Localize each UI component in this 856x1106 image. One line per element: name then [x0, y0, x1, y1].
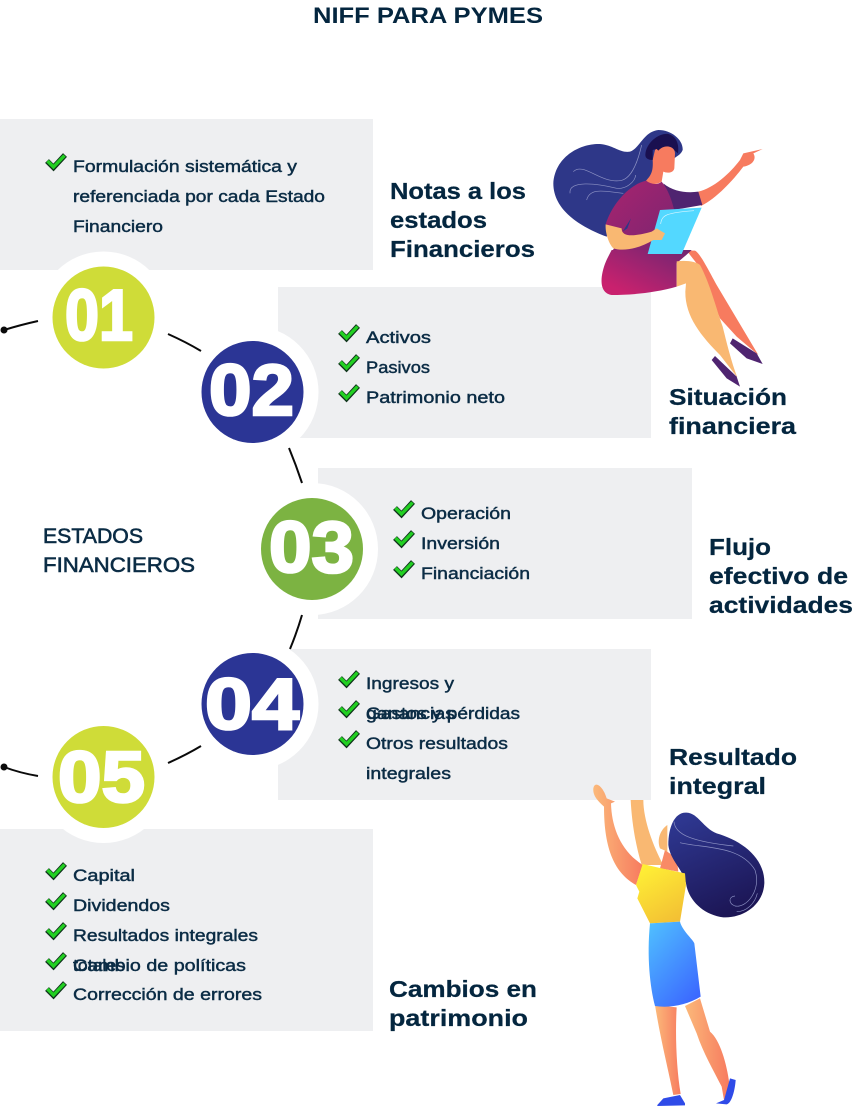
panel: notas backdrop: [0, 119, 373, 270]
center label: estados financieros: FINANCIEROS: [43, 554, 195, 577]
step 03 badge: 03: [269, 508, 354, 588]
list: resultado integral: integrales: [366, 765, 451, 783]
heading: resultado integral: Resultado: [669, 744, 797, 770]
list: situacion financiera: Activos: [366, 329, 431, 347]
center label: estados financieros: ESTADOS: [43, 525, 143, 548]
heading: notas: estados: [390, 207, 487, 233]
heading: cambios en patrimonio: patrimonio: [389, 1005, 528, 1031]
heading: situacion financiera: [669, 384, 796, 439]
panel: situacion backdrop: [278, 287, 651, 438]
list: resultado integral: [340, 672, 520, 783]
illustration: seated woman with tablet: [553, 130, 763, 387]
heading: cambios en patrimonio: Cambios en: [389, 976, 537, 1002]
list: situacion financiera: Pasivos: [366, 359, 430, 377]
list: notas: Financiero: [73, 218, 163, 236]
heading: resultado integral: integral: [669, 773, 766, 799]
list: flujo: Inversión: [421, 535, 500, 553]
heading: resultado integral: [669, 744, 797, 799]
list: cambios en patrimonio: totales: [73, 957, 125, 975]
step 02 badge: 02: [209, 351, 294, 431]
list: cambios en patrimonio: Cambio de políticas: [73, 957, 246, 975]
step 02 badge: [186, 326, 318, 458]
heading: flujo: [709, 534, 853, 618]
list: situacion financiera: [340, 326, 505, 407]
panel: flujo backdrop: [318, 468, 692, 619]
illustration: standing woman holding panel: [593, 785, 764, 1106]
step 05 badge: 05: [58, 738, 145, 818]
list: resultado integral: Otros resultados: [366, 735, 508, 753]
step 04 badge: [186, 638, 318, 770]
heading: situacion financiera: financiera: [669, 413, 796, 439]
connector arc between steps: [0, 321, 302, 776]
list: resultado integral: ganancias: [366, 705, 455, 723]
step 05 badge: [38, 711, 170, 843]
step 01 badge: 01: [65, 276, 133, 356]
heading: notas: [390, 178, 535, 262]
list: cambios en patrimonio: Dividendos: [73, 897, 170, 915]
list: resultado integral: Ingresos y: [366, 675, 455, 693]
list: resultado integral: Gastos y pérdidas: [366, 705, 520, 723]
step 04 badge: 04: [205, 665, 299, 745]
list: notas: referenciada por cada Estado: [73, 188, 325, 206]
heading: situacion financiera: Situación: [669, 384, 787, 410]
heading: flujo: Flujo: [709, 534, 771, 560]
panel: resultado backdrop: [278, 649, 651, 800]
list: notas: [47, 155, 325, 236]
heading: cambios en patrimonio: [389, 976, 537, 1031]
center label: estados financieros: [43, 525, 195, 577]
list: flujo: Operación: [421, 505, 511, 523]
list: cambios en patrimonio: Capital: [73, 867, 135, 885]
list: cambios en patrimonio: Resultados integrales: [73, 927, 258, 945]
heading: notas: Financieros: [390, 236, 535, 262]
list: flujo: Financiación: [421, 565, 530, 583]
heading: flujo: actividades: [709, 592, 853, 618]
heading: notas: Notas a los: [390, 178, 526, 204]
step 01 badge: [38, 252, 170, 384]
panel: patrimonio backdrop: [0, 829, 373, 1031]
heading: flujo: efectivo de: [709, 563, 848, 589]
step 03 badge: [246, 483, 378, 615]
list: notas: Formulación sistemática y: [73, 158, 298, 176]
list: flujo: [395, 502, 530, 583]
list: cambios en patrimonio: Corrección de errores: [73, 986, 262, 1004]
list: cambios en patrimonio: [47, 864, 262, 1004]
title: NIFF PARA PYMES: [313, 3, 543, 28]
list: situacion financiera: Patrimonio neto: [366, 389, 505, 407]
